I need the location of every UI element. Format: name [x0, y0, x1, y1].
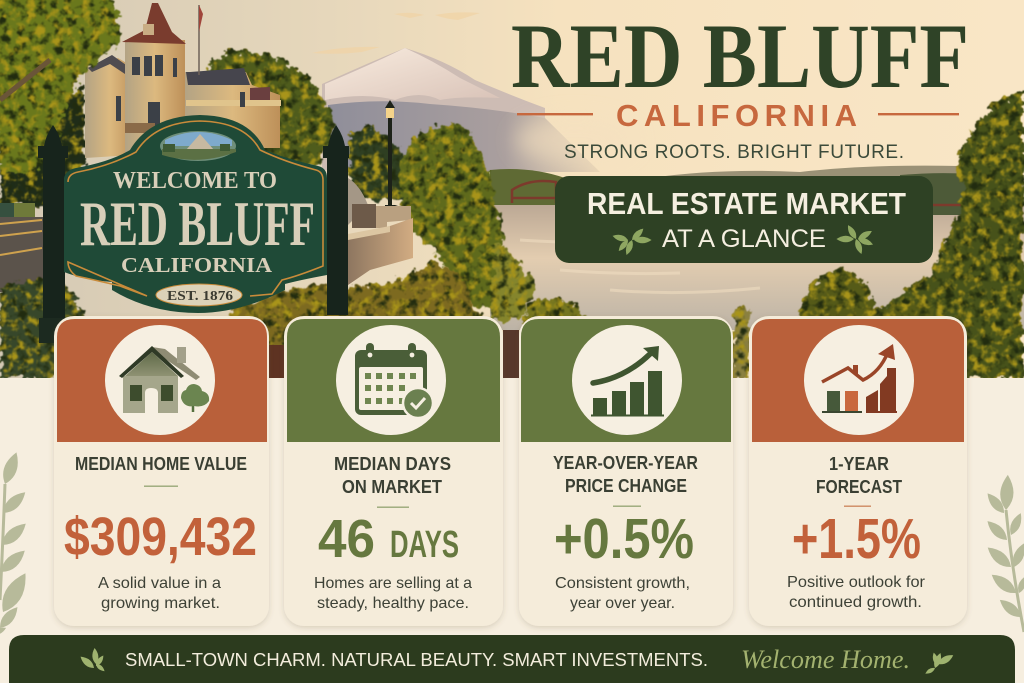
photo: Red Bluff landscape at golden hour [0, 0, 1024, 378]
banner: real estate market at a glance: AT A GLANCE [662, 225, 826, 253]
welcome sign: CALIFORNIA [121, 253, 273, 277]
card header [752, 319, 964, 442]
description: year over year. [570, 595, 675, 612]
description [555, 575, 690, 612]
label: YEAR-OVER-YEAR [553, 453, 698, 473]
value: $309,432 [64, 507, 257, 567]
icon: left laurel sprig [612, 227, 652, 256]
value: DAYS [390, 524, 459, 566]
label [816, 454, 902, 497]
label: MEDIAN HOME VALUE [75, 454, 247, 474]
value [318, 509, 459, 569]
value: +1.5% [792, 507, 921, 571]
label: 1-YEAR [829, 454, 889, 474]
description: Consistent growth, [555, 575, 690, 592]
left oak tree [0, 0, 120, 175]
description [98, 575, 221, 612]
value: 46 [318, 509, 375, 569]
foreground shrubs and mulch [0, 262, 519, 378]
sign crest [160, 131, 236, 161]
description [314, 575, 472, 612]
sign posts [38, 125, 349, 343]
icon: footer sprig right [924, 652, 955, 675]
icon: footer sprig left [78, 648, 106, 673]
street [0, 203, 45, 292]
icon: house with rising arrow [804, 325, 914, 435]
label [553, 453, 698, 496]
panel: year-over-year price change [519, 316, 733, 626]
Victorian building with tower [85, 3, 281, 165]
footer band [9, 635, 1015, 683]
subtitle: California with rules: CALIFORNIA [616, 98, 857, 133]
icon: right laurel sprig [836, 224, 874, 255]
panel: median days on market [284, 316, 503, 626]
decorative side foliage left [0, 450, 33, 636]
welcome sign: RED BLUFF [80, 188, 315, 259]
description: Homes are selling at a [314, 575, 472, 592]
title: Red Bluff: RED BLUFF [511, 5, 969, 107]
welcome sign: WELCOME TO [113, 168, 277, 194]
welcome sign: EST. 1876 [167, 289, 233, 304]
description: steady, healthy pace. [317, 595, 469, 612]
description: continued growth. [789, 594, 922, 611]
decorative side foliage right [984, 475, 1024, 632]
icon: bar chart with rising arrow [572, 325, 682, 435]
description: growing market. [101, 595, 220, 612]
footer band: Welcome Home. [741, 645, 910, 674]
card header [521, 319, 731, 442]
label: ON MARKET [342, 477, 442, 497]
banner: real estate market at a glance: REAL ESTATE MARKET [587, 186, 906, 221]
tagline: STRONG ROOTS. BRIGHT FUTURE. [564, 142, 904, 163]
panel: median home value [54, 316, 269, 626]
banner: real estate market at a glance [555, 176, 933, 263]
right trees [880, 90, 1024, 378]
label [334, 454, 451, 497]
stone wall, road curve and railing [348, 178, 413, 285]
card header [287, 319, 500, 442]
description: Positive outlook for [787, 574, 926, 591]
distant trees and centre tree [347, 123, 404, 204]
mountain with snow [322, 48, 600, 172]
trees behind the building [200, 51, 335, 170]
icon: house and tree [105, 325, 215, 435]
description: A solid value in a [98, 575, 221, 592]
river and far shore [490, 166, 1024, 330]
panel: 1-year forecast [749, 316, 967, 626]
label: FORECAST [816, 477, 902, 497]
label: MEDIAN DAYS [334, 454, 451, 474]
value: +0.5% [554, 507, 694, 571]
welcome sign [64, 115, 327, 313]
footer band: SMALL-TOWN CHARM. NATURAL BEAUTY. SMART INVESTMENTS. [125, 650, 708, 670]
description [787, 574, 926, 611]
card header [57, 319, 267, 442]
street lamp [385, 100, 398, 206]
label: PRICE CHANGE [565, 476, 687, 496]
icon: calendar with check [336, 325, 446, 435]
